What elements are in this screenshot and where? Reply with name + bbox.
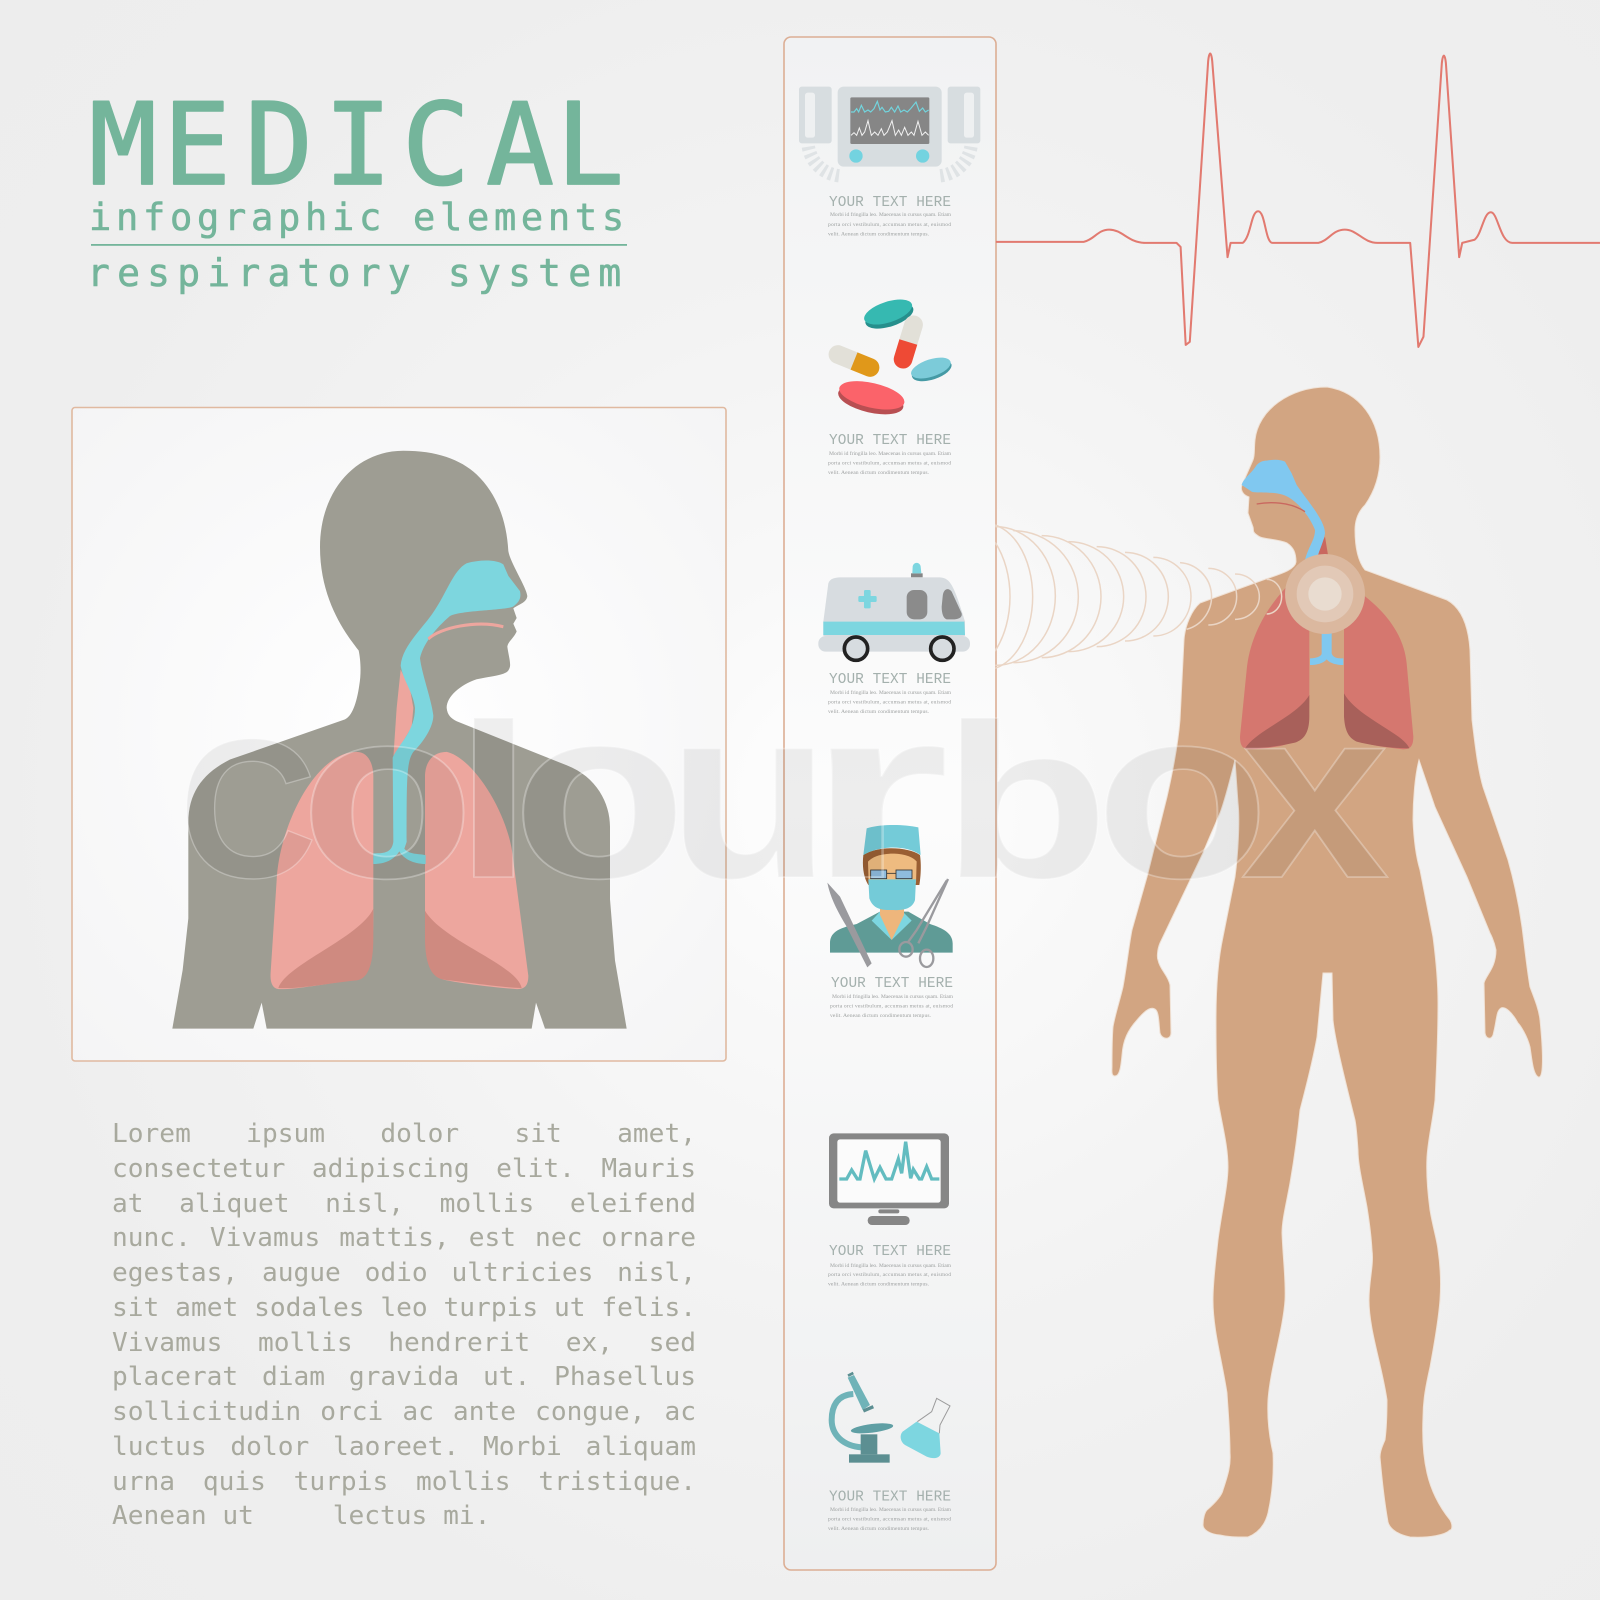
monitor buttons <box>849 149 929 163</box>
text block 2: porta orci vestibulum, accumsan metus at, euismod <box>828 460 951 466</box>
soft palate <box>428 624 503 639</box>
nasal cavity and airway <box>1242 460 1325 567</box>
text block 5: YOUR TEXT HERE <box>829 1244 951 1260</box>
text block 2 <box>828 433 952 476</box>
text block 6: porta orci vestibulum, accumsan metus at, euismod <box>828 1516 951 1522</box>
icon: computer monitor <box>829 1133 949 1225</box>
teal trace <box>839 1142 939 1179</box>
hair <box>863 848 921 885</box>
scalpel <box>827 883 872 967</box>
cable fan left <box>808 147 842 176</box>
right lung <box>1344 583 1413 749</box>
bronchi <box>1310 632 1343 665</box>
body text: lorem ipsum paragraph: placerat diam gravida ut. Phasellus <box>112 1362 696 1392</box>
monitor body <box>838 87 942 167</box>
text block 6: Morbi id fringilla leo. Maecenas in cursus quam. Etiam <box>830 1506 952 1513</box>
glasses <box>871 870 912 879</box>
stand <box>868 1209 910 1225</box>
cable fan right <box>938 147 971 176</box>
text block 4: porta orci vestibulum, accumsan metus at, euismod <box>830 1004 953 1010</box>
body text: lorem ipsum paragraph: luctus dolor laoreet. Morbi aliquam <box>112 1432 696 1462</box>
watermark <box>179 658 1389 929</box>
watermark: o <box>1095 658 1270 929</box>
respiratory organs <box>957 460 1413 749</box>
icon: surgeon <box>827 825 953 967</box>
teal tablet <box>861 294 916 334</box>
microscope arm <box>832 1394 862 1447</box>
body text: lorem ipsum paragraph: sit amet sodales leo turpis ut felis. <box>112 1293 696 1323</box>
blue tablet <box>909 353 954 385</box>
text block 4: velit. Aenean dictum condimentum tempus. <box>830 1013 932 1019</box>
icon: ambulance <box>818 563 970 660</box>
red tablet <box>835 376 907 420</box>
text block 5: porta orci vestibulum, accumsan metus at, euismod <box>828 1272 951 1278</box>
esophagus <box>1318 537 1328 555</box>
text block 3: porta orci vestibulum, accumsan metus at, euismod <box>828 700 951 706</box>
watermark: o <box>512 658 687 929</box>
flask outline <box>917 1398 950 1433</box>
body text: lorem ipsum paragraph <box>112 1119 696 1531</box>
body text: lorem ipsum paragraph: nunc. Vivamus mattis, est nec ornare <box>112 1223 696 1253</box>
watermark: x <box>1241 658 1389 929</box>
microscope tube <box>848 1373 873 1411</box>
text block 3 <box>828 672 952 715</box>
right side unit <box>948 87 980 143</box>
text block 6: YOUR TEXT HERE <box>829 1490 951 1506</box>
body text: lorem ipsum paragraph: Vivamus mollis hendrerit ex, sed <box>112 1328 696 1358</box>
esophagus <box>393 670 413 758</box>
text block 1: velit. Aenean dictum condimentum tempus. <box>828 232 930 238</box>
flask liquid <box>901 1422 941 1458</box>
heartbeat line <box>996 54 1600 347</box>
title: MEDICAL: MEDICAL <box>89 79 624 211</box>
text block 1: Morbi id fringilla leo. Maecenas in cursus quam. Etiam <box>830 211 952 218</box>
right lung lower lobe <box>1344 693 1409 748</box>
stripe <box>823 622 965 635</box>
body text: lorem ipsum paragraph: egestas, augue odio ultricies nisl, <box>112 1258 696 1288</box>
text block 6: velit. Aenean dictum condimentum tempus. <box>828 1526 930 1532</box>
watermark: o <box>300 658 475 929</box>
body text: lorem ipsum paragraph: at aliquet nisl, mollis eleifend <box>112 1189 696 1219</box>
divider line <box>91 244 627 246</box>
watermark: r <box>806 658 950 929</box>
text block 4 <box>830 976 954 1019</box>
scissors <box>899 879 948 967</box>
text block 3: Morbi id fringilla leo. Maecenas in cursus quam. Etiam <box>830 689 952 696</box>
siren <box>911 563 923 577</box>
red capsule <box>891 313 925 371</box>
mask <box>868 879 916 910</box>
text block 2: Morbi id fringilla leo. Maecenas in cursus quam. Etiam <box>829 450 952 457</box>
panel: head and torso diagram <box>72 408 726 1061</box>
microscope base <box>849 1434 890 1463</box>
body text: lorem ipsum paragraph: Aenean ut lectus mi. <box>112 1501 490 1531</box>
text block 1: YOUR TEXT HERE <box>829 195 951 211</box>
text block 3: velit. Aenean dictum condimentum tempus. <box>828 709 930 715</box>
airway <box>373 560 520 864</box>
torso silhouette with lungs and airway <box>172 451 627 1029</box>
collar <box>872 912 912 940</box>
text block 2: YOUR TEXT HERE <box>829 433 951 449</box>
panel: icon column <box>784 37 996 1570</box>
text block 4: YOUR TEXT HERE <box>831 976 953 992</box>
watermark: b <box>942 680 1109 924</box>
panel frame <box>72 408 726 1061</box>
body text: lorem ipsum paragraph: urna quis turpis mollis tristique. <box>112 1467 696 1497</box>
screen casing <box>829 1133 949 1208</box>
soft palate <box>1257 503 1305 512</box>
text block 1 <box>828 195 952 238</box>
left side unit <box>799 87 832 143</box>
text block 2: velit. Aenean dictum condimentum tempus. <box>828 470 930 476</box>
text block 1: porta orci vestibulum, accumsan metus at, euismod <box>828 222 951 228</box>
icon: patient monitor <box>799 87 980 176</box>
body text: lorem ipsum paragraph: consectetur adipiscing elit. Mauris <box>112 1154 696 1184</box>
left lung <box>1240 583 1309 749</box>
watermark: C <box>179 699 317 920</box>
white trace <box>851 121 929 135</box>
left lung lower lobe <box>1245 695 1309 748</box>
column frame <box>784 37 996 1570</box>
monitor screen <box>850 97 929 144</box>
subtitle: respiratory system: respiratory system <box>87 251 628 295</box>
watermark: u <box>667 658 831 929</box>
subtitle: infographic elements: infographic elements <box>89 196 629 239</box>
body text: lorem ipsum paragraph: sollicitudin orci ac ante congue, ac <box>112 1397 696 1427</box>
text block 4: Morbi id fringilla leo. Maecenas in cursus quam. Etiam <box>832 993 954 1000</box>
icon: pills <box>826 294 954 420</box>
wheels <box>844 637 954 660</box>
highlighted focus circle <box>1285 554 1365 634</box>
left lung <box>271 752 373 989</box>
text block 5 <box>828 1244 952 1288</box>
neck <box>880 903 904 940</box>
right lung lower lobe <box>425 911 522 988</box>
right lung <box>425 752 528 989</box>
text block 5: velit. Aenean dictum condimentum tempus. <box>828 1282 930 1288</box>
cap <box>863 825 921 855</box>
text block 6 <box>828 1490 952 1532</box>
cyan trace <box>851 101 929 112</box>
ambulance body <box>823 577 965 636</box>
body text: lorem ipsum paragraph: Lorem ipsum dolor sit amet, <box>112 1119 696 1149</box>
text block 5: Morbi id fringilla leo. Maecenas in cursus quam. Etiam <box>830 1262 952 1269</box>
bumper <box>818 636 970 652</box>
text block 3: YOUR TEXT HERE <box>829 672 951 688</box>
title block <box>87 79 629 295</box>
body silhouette <box>1112 387 1542 1537</box>
orange capsule <box>826 342 882 380</box>
windows <box>907 589 962 619</box>
watermark: l <box>454 678 533 923</box>
figure: full body with respiratory system <box>957 387 1542 1537</box>
screen <box>837 1139 941 1203</box>
microscope stage <box>850 1421 894 1435</box>
scrubs <box>830 912 953 953</box>
icon: microscope and flask <box>832 1373 950 1463</box>
left lung lower lobe <box>278 909 373 988</box>
magnifying pulse arcs <box>996 524 1282 669</box>
grey body silhouette <box>172 451 627 1029</box>
medical cross <box>858 590 877 608</box>
face <box>868 854 917 883</box>
